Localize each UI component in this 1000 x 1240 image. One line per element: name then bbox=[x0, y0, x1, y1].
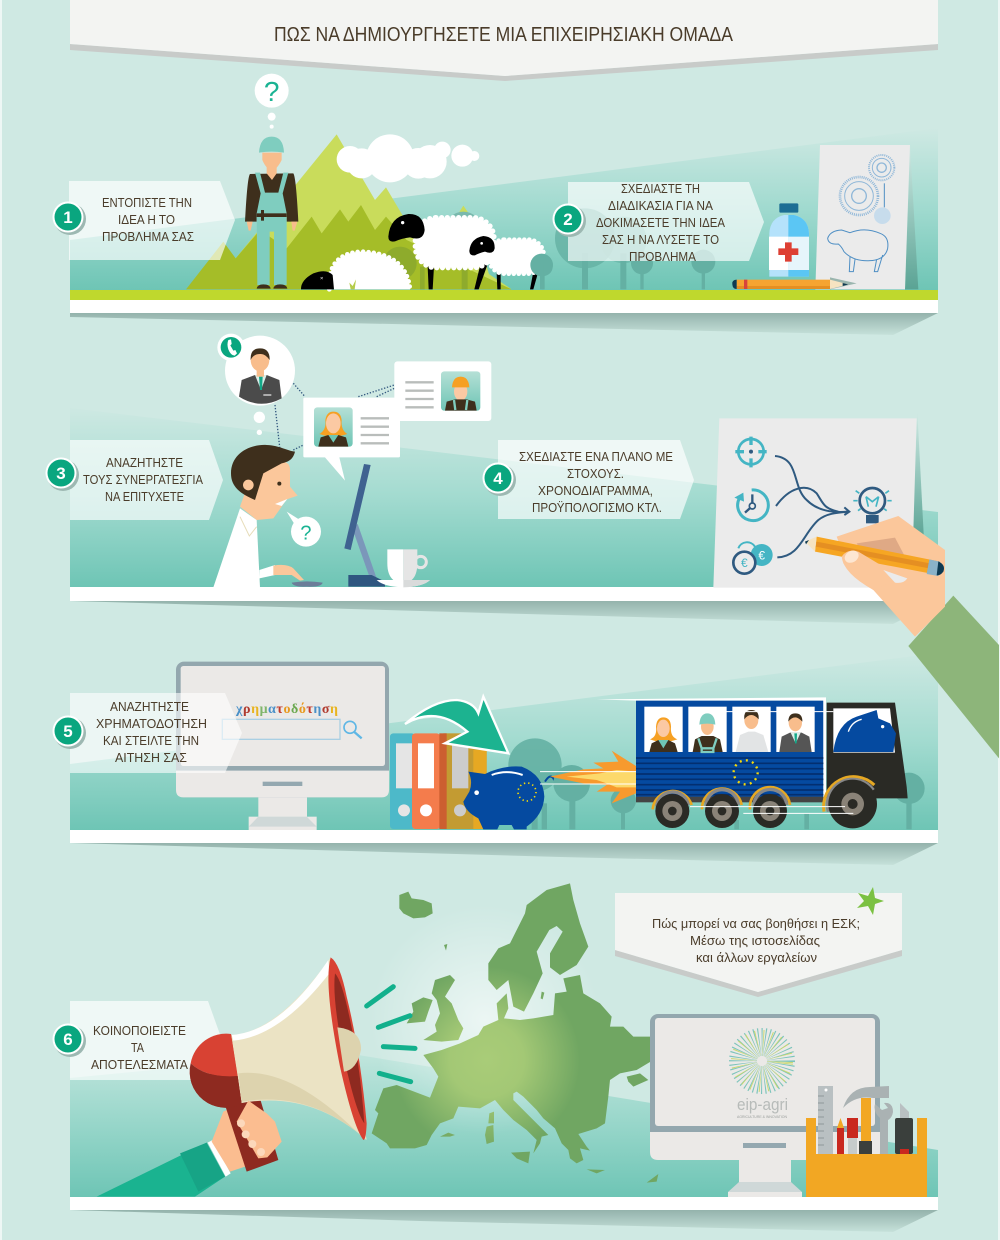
step 6 text: ΚΟΙΝΟΠΟΙΕΙΣΤΕ bbox=[93, 1023, 186, 1038]
search box bbox=[222, 719, 362, 739]
step 6 text bbox=[91, 1023, 188, 1072]
badge 4 bbox=[482, 462, 516, 496]
scene: mountains, farmer and sheep bbox=[186, 74, 553, 289]
callout text: Μέσω της ιστοσελίδας bbox=[690, 933, 820, 948]
paper gap between fingers bbox=[883, 570, 907, 583]
farmer bbox=[245, 137, 298, 289]
box knife bbox=[895, 1103, 913, 1154]
badge 6: 6 bbox=[63, 1030, 73, 1049]
step 1 text: ΠΡΟΒΛΗΜΑ ΣΑΣ bbox=[102, 229, 194, 244]
step 1 text: ΙΔΕΑ Η ΤΟ bbox=[118, 212, 175, 227]
toolbox bbox=[806, 1086, 927, 1197]
badge 4: 4 bbox=[493, 469, 503, 488]
connection dotted lines bbox=[275, 383, 394, 450]
step 5 text: ΚΑΙ ΣΤΕΙΛΤΕ ΤΗΝ bbox=[103, 733, 199, 748]
map glow bbox=[370, 905, 600, 1135]
arm bbox=[97, 1140, 231, 1197]
pencil bbox=[805, 537, 944, 576]
scene: man at computer with contacts bbox=[213, 334, 491, 587]
step 3 text: ΤΟΥΣ ΣΥΝΕΡΓΑΤΕΣΓΙΑ bbox=[83, 472, 203, 487]
scene: funding monitor, binders and piggy bank bbox=[176, 662, 562, 830]
Scandinavia bbox=[488, 883, 588, 1012]
cloud bbox=[337, 134, 479, 182]
step 6 text: ΑΠΟΤΕΛΕΣΜΑΤΑ bbox=[91, 1057, 188, 1072]
finger nail bbox=[842, 548, 861, 565]
dome overlap bbox=[190, 1034, 242, 1108]
icon: target bbox=[735, 437, 767, 467]
ruler bbox=[818, 1086, 833, 1154]
thought dots bbox=[254, 412, 265, 435]
badge 1 bbox=[52, 202, 86, 235]
small sheep bbox=[469, 236, 544, 289]
finger nails bbox=[237, 1119, 265, 1156]
hand bbox=[837, 516, 945, 637]
badge 5: 5 bbox=[63, 722, 73, 741]
step 2 text: ΠΡΟΒΛΗΜΑ bbox=[629, 249, 696, 264]
wheels bbox=[653, 777, 877, 828]
logo wordmark: eip-agri bbox=[737, 1095, 788, 1114]
card: woman contact bbox=[303, 398, 400, 481]
title: ΠΩΣ ΝΑ ΔΗΜΙΟΥΡΓΗΣΕΤΕ ΜΙΑ ΕΠΙΧΕΙΡΗΣΙΑΚΗ ΟΜΑΔΑ bbox=[274, 24, 734, 46]
trees bbox=[445, 212, 553, 289]
step 2 text: ΔΟΚΙΜΑΣΕΤΕ ΤΗΝ ΙΔΕΑ bbox=[596, 215, 725, 230]
coffee cup bbox=[377, 549, 430, 587]
step 5 text: ΑΙΤΗΣΗ ΣΑΣ bbox=[115, 750, 187, 765]
step 4 text: ΣΤΟΧΟΥΣ. bbox=[567, 466, 624, 481]
Great Britain bbox=[423, 975, 463, 1042]
linked weight bbox=[874, 183, 891, 224]
Ireland bbox=[407, 997, 433, 1023]
palm shadow bbox=[857, 538, 905, 557]
step 2 text bbox=[596, 181, 725, 264]
contact bubble: consultant bbox=[225, 336, 295, 406]
window: worker bbox=[688, 707, 727, 752]
speech bubble with question bbox=[287, 512, 321, 547]
pencil bbox=[732, 277, 857, 289]
fingers bbox=[237, 1101, 282, 1158]
palm bbox=[212, 1103, 250, 1172]
step 6 text: ΤΑ bbox=[131, 1040, 144, 1055]
step 2 text: ΔΙΑΔΙΚΑΣΙΑ ΓΙΑ ΝΑ bbox=[608, 198, 713, 213]
continental Europe bbox=[372, 975, 653, 1163]
badge 2: 2 bbox=[563, 210, 573, 229]
grazing sheep bbox=[301, 252, 410, 289]
hammer bbox=[843, 1086, 889, 1154]
step 4 text: ΣΧΕΔΙΑΣΤΕ ΕΝΑ ΠΛΑΝΟ ΜΕ bbox=[519, 449, 673, 464]
step 3 text: ΑΝΑΖΗΤΗΣΤΕ bbox=[106, 455, 183, 470]
piggy bank bbox=[463, 766, 560, 829]
scene: plan on paper bbox=[713, 412, 924, 588]
badge 5 bbox=[52, 716, 86, 749]
step 6 banner bbox=[70, 1001, 222, 1080]
callout banner bbox=[615, 887, 902, 997]
logo burst bbox=[742, 1041, 782, 1081]
truck cab bbox=[827, 703, 908, 798]
paper with sheep and gears sketch bbox=[815, 145, 918, 289]
wrench bbox=[875, 1103, 893, 1154]
badge 3 bbox=[46, 458, 79, 491]
step 1 banner bbox=[69, 181, 235, 260]
callout text: Πώς μπορεί να σας βοηθήσει η ΕΣΚ; bbox=[652, 916, 860, 931]
callout text bbox=[652, 916, 860, 965]
rocket flames bbox=[550, 751, 636, 803]
truck box bbox=[597, 697, 826, 802]
finger over pencil bbox=[842, 551, 907, 590]
islands bbox=[627, 1073, 648, 1087]
icon: coins: € bbox=[758, 548, 765, 562]
speech bubble with question: ? bbox=[300, 522, 312, 544]
step 5 banner bbox=[70, 693, 242, 773]
speed lines bbox=[540, 712, 853, 813]
gear small bbox=[869, 155, 894, 180]
window: woman bbox=[644, 707, 683, 752]
panel: step 1 and 2 background bbox=[70, 128, 938, 335]
card: worker contact bbox=[394, 361, 491, 421]
step 1 text bbox=[102, 195, 194, 244]
icon: green star bbox=[857, 887, 884, 915]
step 1 text: ΕΝΤΟΠΙΣΤΕ ΤΗΝ bbox=[102, 195, 192, 210]
pencil bbox=[837, 1118, 844, 1154]
step 3 text: ΝΑ ΕΠΙΤΥΧΕΤΕ bbox=[105, 489, 184, 504]
mountains bbox=[186, 134, 512, 289]
header banner bbox=[70, 0, 938, 81]
step 5 text bbox=[96, 699, 207, 765]
Iceland bbox=[399, 892, 433, 918]
search keyword: χρηματοδότηση bbox=[235, 702, 338, 717]
paper bbox=[713, 412, 924, 588]
man at desk bbox=[213, 445, 323, 587]
computer monitor side view bbox=[344, 464, 385, 587]
trees bbox=[530, 208, 715, 289]
icon: coins: € bbox=[741, 556, 748, 570]
step 5 text: ΑΝΑΖΗΤΗΣΤΕ bbox=[110, 699, 189, 714]
callout text: και άλλων εργαλείων bbox=[696, 950, 817, 965]
panel: step 3 and 4 background bbox=[70, 408, 938, 624]
panel: step 6 background bbox=[70, 1052, 938, 1232]
desktop monitor bbox=[176, 662, 389, 830]
monitor with EIP-AGRI logo bbox=[650, 1014, 880, 1197]
grazing sheep: × bbox=[320, 276, 323, 282]
bottle bbox=[769, 203, 809, 277]
handle bbox=[225, 1098, 278, 1172]
step 4 banner bbox=[498, 440, 694, 519]
marker bbox=[847, 1118, 858, 1154]
step 3 banner bbox=[70, 440, 223, 520]
badge 3: 3 bbox=[56, 464, 66, 483]
scene: truck bbox=[540, 697, 925, 829]
step 2 banner bbox=[568, 181, 764, 264]
binder: mustard bbox=[443, 733, 487, 829]
scene: background trees, bottle, pencil and paper bbox=[530, 145, 918, 289]
step 2 text: ΣΑΣ Η ΝΑ ΛΥΣΕΤΕ ΤΟ bbox=[602, 232, 719, 247]
horn bbox=[190, 957, 367, 1140]
binder: orange bbox=[412, 733, 447, 829]
thought bubble: ? bbox=[264, 76, 279, 107]
step 3 text bbox=[83, 455, 203, 504]
step 2 text: ΣΧΕΔΙΑΣΤΕ ΤΗ bbox=[621, 181, 700, 196]
sheep sketch bbox=[828, 230, 888, 272]
panel: step 5 background bbox=[70, 653, 938, 865]
binder: blue bbox=[390, 733, 415, 829]
icon: phone badge bbox=[217, 334, 245, 361]
background trees bbox=[508, 738, 562, 829]
icon: coins bbox=[733, 542, 773, 574]
flow arrows bbox=[775, 456, 849, 557]
scene: binders, arrow and piggy bank bbox=[390, 697, 560, 829]
hand with pencil and sleeve bbox=[805, 516, 999, 758]
logo tagline: AGRICULTURE & INNOVATION bbox=[737, 1115, 787, 1119]
window: manager bbox=[776, 707, 815, 752]
badge 1: 1 bbox=[63, 208, 73, 227]
curved arrow bbox=[405, 697, 508, 753]
scene: megaphone bbox=[97, 957, 415, 1197]
step 5 text: ΧΡΗΜΑΤΟΔΟΤΗΣΗ bbox=[96, 716, 207, 731]
sleeve bbox=[908, 596, 999, 758]
background trees bbox=[553, 765, 925, 829]
icon: light bulb bbox=[853, 488, 892, 523]
step 4 text: ΠΡΟΫΠΟΛΟΓΙΣΜΟ ΚΤΛ. bbox=[532, 500, 662, 515]
map of Europe bbox=[372, 883, 658, 1183]
sound lines bbox=[367, 987, 415, 1082]
thought bubble bbox=[255, 74, 289, 129]
window: doctor bbox=[732, 707, 771, 752]
icon: clock bbox=[734, 490, 768, 521]
badge 6 bbox=[52, 1024, 86, 1057]
badge 2 bbox=[552, 204, 586, 237]
large sheep bbox=[388, 214, 494, 289]
step 4 text bbox=[519, 449, 673, 515]
step 6 megaphone overlap bbox=[190, 1034, 242, 1108]
gear large bbox=[840, 177, 878, 215]
step 4 text: ΧΡΟΝΟΔΙΑΓΡΑΜΜΑ, bbox=[538, 483, 653, 498]
box bbox=[806, 1118, 927, 1197]
